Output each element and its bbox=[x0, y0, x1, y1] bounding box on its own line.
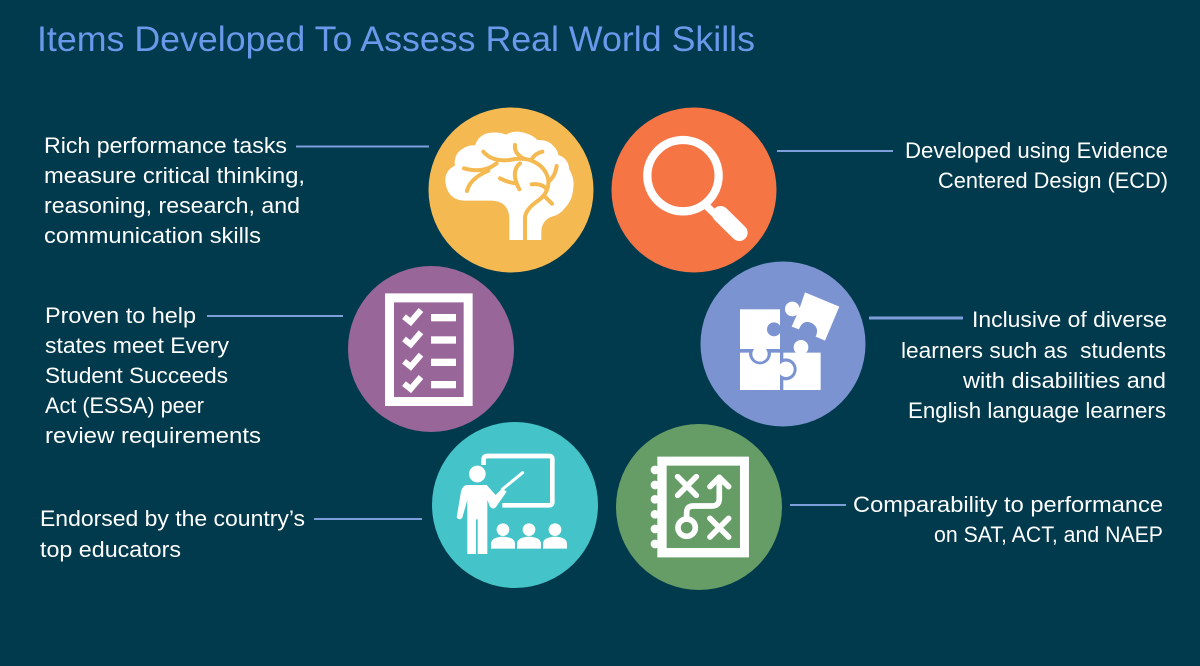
text block: evidence centered design: Developed using Evidence bbox=[905, 138, 1168, 163]
text block: inclusive: Inclusive of diverse bbox=[972, 307, 1167, 332]
text block: inclusive bbox=[901, 307, 1167, 423]
text block: comparability bbox=[853, 492, 1163, 547]
icon: magnifying glass bbox=[647, 140, 739, 233]
text block: inclusive: with disabilities and bbox=[962, 368, 1166, 393]
text block: ESSA: Act (ESSA) peer bbox=[45, 393, 204, 418]
text block: evidence centered design bbox=[905, 138, 1168, 193]
panel: puzzle circle with icon bbox=[700, 262, 866, 426]
connector: notebook bbox=[790, 504, 846, 506]
text block: performance tasks: Rich performance tasks bbox=[44, 133, 287, 158]
text block: ESSA: Student Succeeds bbox=[45, 363, 228, 388]
connector: magnifier bbox=[777, 150, 893, 152]
connector: teacher bbox=[314, 518, 422, 520]
text block: educators bbox=[40, 506, 305, 562]
panel: magnifier circle with icon bbox=[612, 108, 776, 272]
text block: performance tasks: communication skills bbox=[44, 223, 261, 248]
connector: checklist bbox=[207, 315, 343, 317]
text block: educators: top educators bbox=[40, 537, 181, 562]
text block: performance tasks: measure critical thinking, bbox=[44, 163, 305, 188]
icon: brain bbox=[445, 132, 574, 240]
icon: strategy notebook bbox=[651, 457, 749, 557]
text block: evidence centered design: Centered Design (ECD) bbox=[938, 168, 1168, 193]
text block: inclusive: English language learners bbox=[908, 398, 1166, 423]
text block: ESSA: review requirements bbox=[45, 423, 261, 448]
text block: comparability: on SAT, ACT, and NAEP bbox=[934, 522, 1163, 547]
panel: checklist circle with icon bbox=[348, 266, 514, 432]
text block: performance tasks: reasoning, research, and bbox=[44, 193, 300, 218]
connector: puzzle bbox=[869, 316, 963, 320]
text block: ESSA bbox=[45, 303, 261, 448]
text block: inclusive: learners such as students bbox=[901, 338, 1166, 363]
icon: teacher at board with audience bbox=[457, 456, 567, 554]
text block: comparability: Comparability to performance bbox=[853, 492, 1163, 517]
text block: educators: Endorsed by the country’s bbox=[40, 506, 305, 531]
icon: checklist bbox=[385, 293, 473, 406]
panel: teacher circle with icon bbox=[432, 422, 598, 588]
connector: brain bbox=[296, 146, 429, 148]
text block: ESSA: states meet Every bbox=[45, 333, 229, 358]
panel: brain circle with icon bbox=[428, 108, 594, 272]
title: Items Developed To Assess Real World Skills bbox=[37, 20, 755, 59]
icon: puzzle pieces bbox=[740, 292, 839, 390]
text block: ESSA: Proven to help bbox=[45, 303, 196, 328]
panel: playbook circle with icon bbox=[616, 424, 782, 590]
text block: performance tasks bbox=[44, 133, 305, 248]
